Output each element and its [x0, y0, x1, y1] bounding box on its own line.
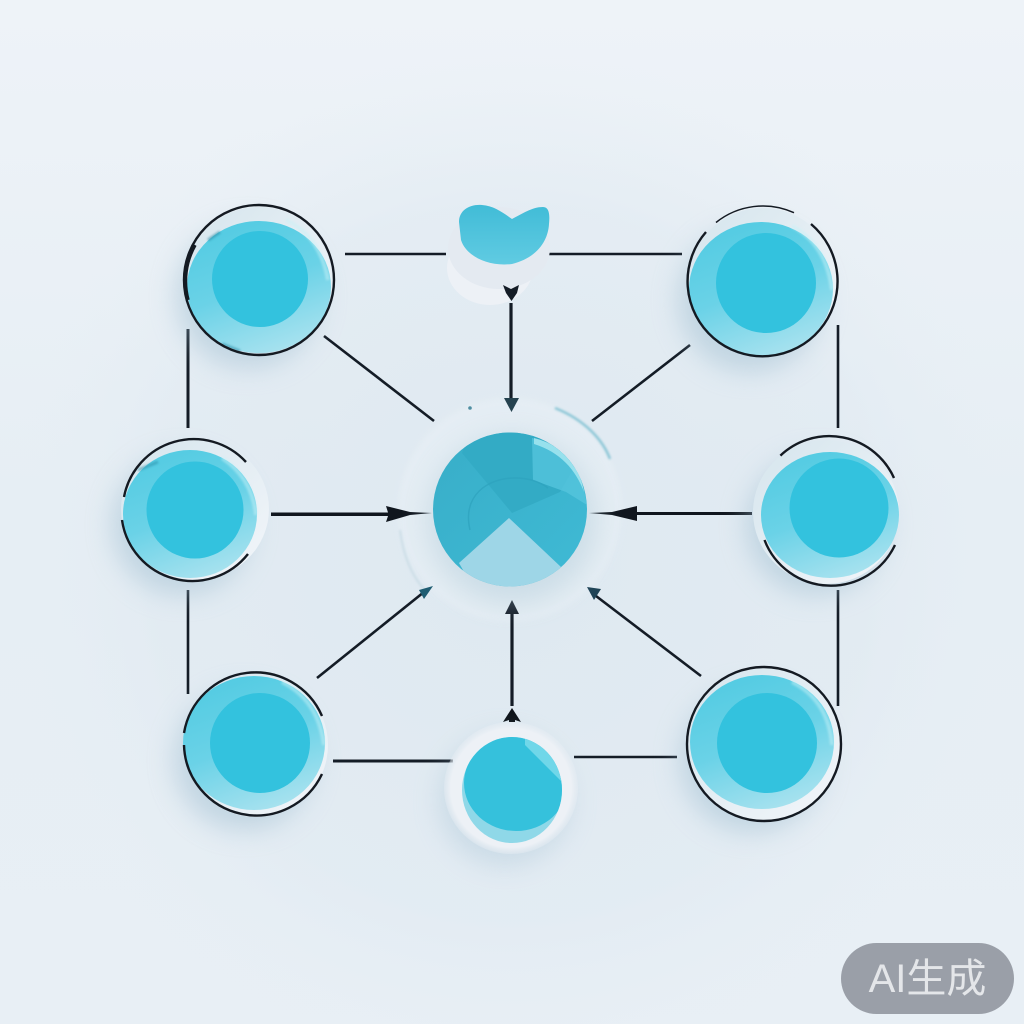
arrow: top node to hub [503, 285, 519, 412]
hub lower wedge [459, 518, 561, 586]
node: top left [176, 205, 334, 368]
arrow: left node to hub [271, 506, 432, 522]
node: bottom centre [439, 722, 578, 866]
badge: AI generated: AI生成 [869, 957, 986, 1001]
node: bottom left [174, 672, 328, 830]
hub top facet [464, 432, 574, 512]
diagonal arrow: bottom right to hub [587, 587, 701, 676]
arrow: bottom node to hub [503, 600, 521, 722]
hub highlight [532, 438, 587, 505]
node: top right [678, 206, 838, 372]
hub inner arc [468, 480, 541, 530]
hub halo ring [398, 398, 622, 622]
arrow: right node to hub [589, 506, 752, 521]
node: bottom right [680, 667, 841, 832]
connector lines: outer frame [188, 254, 838, 761]
network diagram [102, 204, 1014, 1014]
badge: AI generated [841, 943, 1014, 1014]
node: middle left [112, 438, 269, 595]
diagonal arrow: bottom left to hub [317, 586, 433, 678]
hub node [428, 420, 596, 604]
node: top heart icon [447, 205, 550, 305]
diagonal arrow: top right to hub [592, 345, 690, 421]
node: middle right [746, 436, 899, 595]
diagonal arrow: top left to hub [324, 336, 434, 421]
heart shape [459, 205, 549, 264]
